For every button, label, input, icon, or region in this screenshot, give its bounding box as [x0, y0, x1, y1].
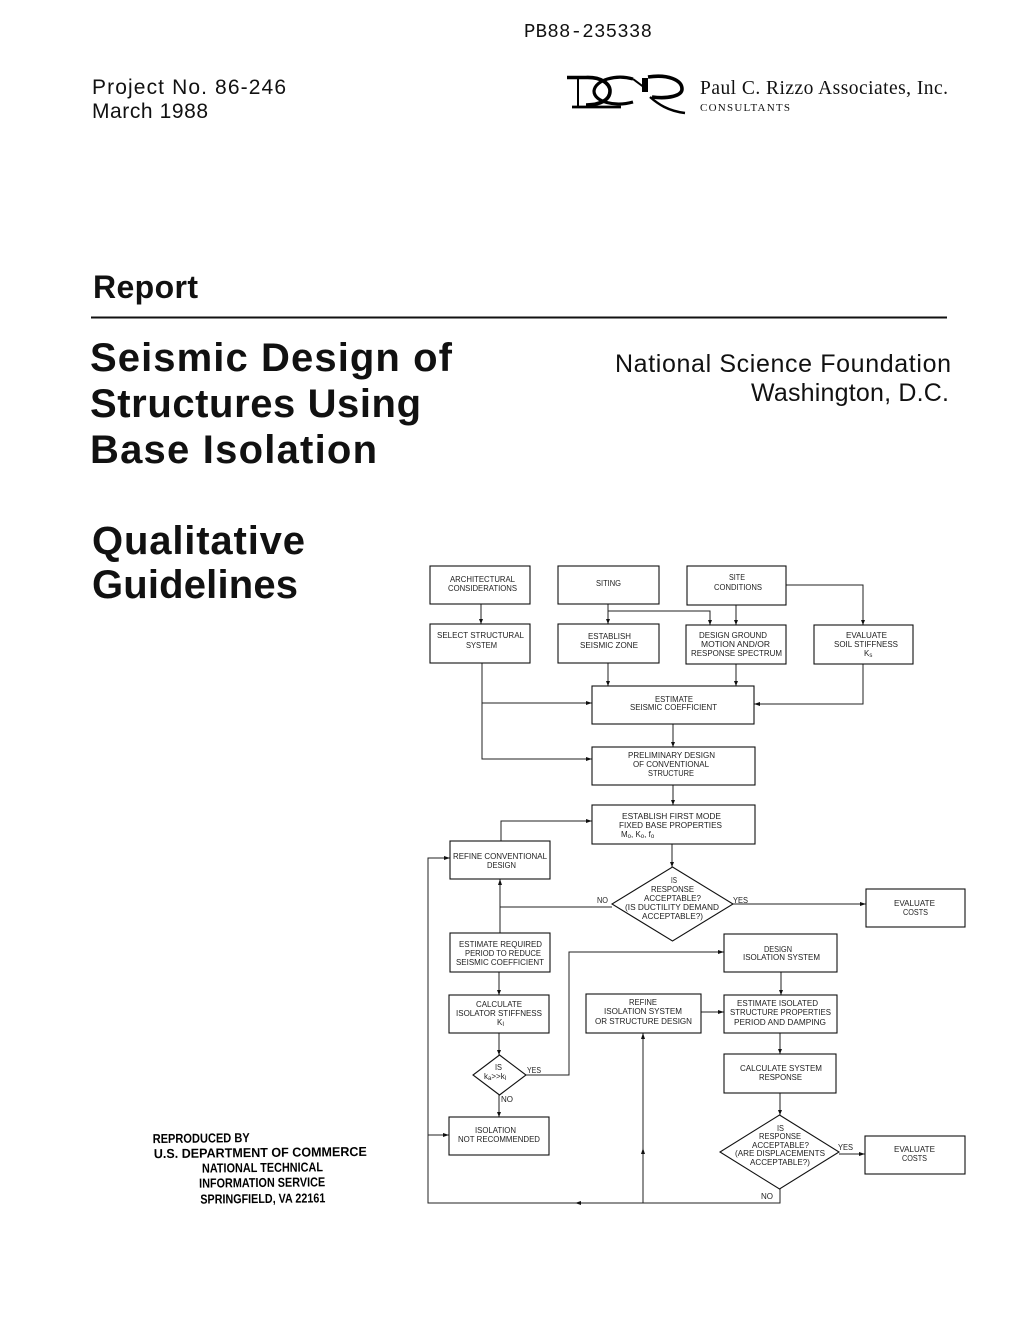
box: design isolation system: DESIGN: [764, 945, 792, 954]
box: establish first mode properties: o: [628, 834, 632, 840]
box: evaluate soil stiffness: s: [869, 653, 872, 659]
box: site conditions: SITE: [729, 573, 745, 582]
box: estimate seismic coefficient: SEISMIC COEFFICIENT: [630, 703, 717, 712]
label: yes: YES: [527, 1066, 541, 1075]
box: establish first mode properties: [592, 805, 755, 844]
box: evaluate costs upper: COSTS: [903, 908, 928, 917]
box: preliminary design: STRUCTURE: [648, 769, 694, 778]
box: refine conventional design: REFINE CONVENTIONAL: [453, 852, 548, 861]
sponsor block: National Science Foundation: [615, 350, 951, 378]
project number and date: Project No. 86-246: [92, 76, 286, 99]
decision: is response acceptable, displacements: RESPONSE: [759, 1132, 801, 1141]
decision: is response acceptable, ductility: ACCEPTABLE?): [642, 912, 703, 921]
decision: is ka much greater than ki: IS: [495, 1063, 502, 1072]
box: site conditions: [687, 566, 786, 605]
box: select structural system: SYSTEM: [466, 641, 497, 650]
box: refine isolation system: [586, 994, 701, 1033]
box: refine conventional design: [450, 841, 550, 879]
box: calculate system response: RESPONSE: [759, 1073, 802, 1082]
label: yes: YES: [838, 1143, 853, 1152]
box: estimate seismic coefficient: ESTIMATE: [655, 695, 693, 704]
title: Seismic Design of: [90, 336, 453, 380]
flowchart: [428, 566, 965, 1205]
box: establish seismic zone: SEISMIC ZONE: [580, 641, 638, 650]
decision: is ka much greater than ki: k: [484, 1072, 488, 1081]
document number: PB88-235338: [524, 21, 652, 43]
box: estimate required period: [450, 933, 550, 972]
decision: is response acceptable, ductility: RESPONSE: [651, 885, 694, 894]
box: evaluate soil stiffness: [814, 625, 913, 664]
box: preliminary design: [592, 747, 755, 785]
box: estimate required period: PERIOD TO REDUCE: [465, 949, 541, 958]
box: architectural considerations: ARCHITECTURAL: [450, 575, 516, 584]
box: evaluate costs lower: EVALUATE: [894, 1145, 935, 1154]
box: estimate isolated structure properties: ESTIMATE ISOLATED: [737, 999, 818, 1008]
decision: is ka much greater than ki: [473, 1055, 526, 1095]
box: isolation not recommended: NOT RECOMMENDED: [458, 1135, 540, 1144]
decision: is response acceptable, displacements: ACCEPTABLE?): [750, 1158, 810, 1167]
decision: is response acceptable, ductility: [612, 867, 733, 941]
box: select structural system: SELECT STRUCTURAL: [437, 631, 525, 640]
subtitle: [92, 519, 305, 607]
subtitle: Guidelines: [92, 563, 298, 607]
box: site conditions: CONDITIONS: [714, 583, 762, 592]
box: estimate isolated structure properties: [724, 995, 837, 1033]
box: calculate system response: CALCULATE SYSTEM: [740, 1064, 822, 1073]
decision: is response acceptable, ductility: ACCEPTABLE?: [644, 894, 702, 903]
title: Base Isolation: [90, 428, 377, 472]
box: design isolation system: [724, 934, 837, 972]
box: estimate required period: ESTIMATE REQUIRED: [459, 940, 542, 949]
box: design ground motion: MOTION AND/OR: [701, 640, 770, 649]
box: establish first mode properties: o: [651, 834, 655, 840]
company name: Paul C. Rizzo Associates, Inc.: [700, 78, 948, 99]
box: evaluate costs upper: EVALUATE: [894, 899, 935, 908]
box: refine conventional design: DESIGN: [487, 861, 516, 870]
title: [90, 336, 453, 472]
box: isolation not recommended: [449, 1117, 549, 1155]
box: isolation not recommended: ISOLATION: [475, 1126, 516, 1135]
decision: is response acceptable, displacements: IS: [777, 1124, 784, 1133]
box: calculate isolator stiffness: I: [502, 1022, 504, 1028]
decision: is response acceptable, ductility: (IS DUCTILITY DEMAND: [625, 903, 719, 912]
icon: company logo: [567, 76, 685, 113]
decision: is response acceptable, displacements: [720, 1115, 839, 1189]
box: estimate isolated structure properties: PERIOD AND DAMPING: [734, 1018, 826, 1027]
box: estimate isolated structure properties: STRUCTURE PROPERTIES: [730, 1008, 831, 1017]
project number and date: [92, 76, 286, 123]
title: Structures Using: [90, 382, 421, 426]
box: evaluate soil stiffness: K: [864, 649, 869, 658]
subtitle: Qualitative: [92, 519, 305, 563]
box: estimate seismic coefficient: [592, 686, 754, 724]
divider rule: [91, 316, 947, 318]
box: evaluate soil stiffness: SOIL STIFFNESS: [834, 640, 898, 649]
box: evaluate costs lower: COSTS: [902, 1154, 927, 1163]
connector arrows: upper section: [479, 585, 865, 867]
box: establish seismic zone: [558, 624, 659, 663]
box: calculate isolator stiffness: ISOLATOR STIFFNESS: [456, 1009, 542, 1018]
box: evaluate soil stiffness: EVALUATE: [846, 631, 887, 640]
box: preliminary design: OF CONVENTIONAL: [633, 760, 710, 769]
box: design ground motion: DESIGN GROUND: [699, 631, 767, 640]
reproduction notice: REPRODUCED BY: [153, 1130, 250, 1146]
box: establish first mode properties: , f: [644, 830, 652, 839]
box: estimate required period: SEISMIC COEFFICIENT: [456, 958, 544, 967]
box: architectural considerations: [430, 566, 530, 604]
decision: is response acceptable, displacements: ACCEPTABLE?: [752, 1141, 810, 1150]
box: establish first mode properties: o: [641, 834, 645, 840]
connector arrows: lower section: [428, 856, 866, 1205]
box: evaluate costs upper: [866, 889, 965, 927]
reproduction notice: INFORMATION SERVICE: [199, 1174, 325, 1191]
box: refine isolation system: ISOLATION SYSTEM: [604, 1007, 682, 1016]
sponsor block: Washington, D.C.: [751, 379, 949, 407]
box: refine isolation system: REFINE: [629, 998, 657, 1007]
reproduction notice: U.S. DEPARTMENT OF COMMERCE: [154, 1144, 367, 1161]
box: siting: [558, 566, 659, 604]
box: establish first mode properties: ESTABLISH FIRST MODE: [622, 812, 721, 821]
reproduction notice: NATIONAL TECHNICAL: [202, 1159, 323, 1176]
label: no: NO: [761, 1192, 773, 1201]
label: yes: YES: [733, 896, 748, 905]
box: select structural system: [430, 624, 530, 663]
label: no: NO: [597, 896, 608, 905]
box: calculate isolator stiffness: [449, 995, 549, 1033]
box: design ground motion: [686, 625, 786, 664]
box: calculate system response: [724, 1054, 836, 1093]
decision: is response acceptable, ductility: IS: [671, 876, 677, 885]
sponsor block: [615, 350, 951, 407]
box: calculate isolator stiffness: CALCULATE: [476, 1000, 522, 1009]
box: preliminary design: PRELIMINARY DESIGN: [628, 751, 715, 760]
box: refine isolation system: OR STRUCTURE DESIGN: [595, 1017, 692, 1026]
box: establish first mode properties: , K: [631, 830, 641, 839]
decision: is response acceptable, displacements: (ARE DISPLACEMENTS: [735, 1149, 825, 1158]
company name: CONSULTANTS: [700, 102, 790, 114]
decision: is ka much greater than ki: >>k: [491, 1072, 506, 1081]
box: siting: SITING: [596, 579, 621, 588]
reproduction notice: SPRINGFIELD, VA 22161: [200, 1190, 325, 1207]
box: design isolation system: ISOLATION SYSTEM: [743, 953, 820, 962]
label: no: NO: [501, 1095, 513, 1104]
box: calculate isolator stiffness: K: [497, 1018, 502, 1027]
box: architectural considerations: CONSIDERATIONS: [448, 584, 517, 593]
project number and date: March 1988: [92, 100, 208, 123]
decision: is ka much greater than ki: I: [505, 1076, 507, 1082]
box: establish first mode properties: FIXED BASE PROPERTIES: [619, 821, 722, 830]
reproduction notice: [153, 1129, 368, 1207]
heading: report: Report: [93, 269, 198, 305]
box: evaluate costs lower: [865, 1136, 965, 1174]
box: establish first mode properties: M: [621, 830, 628, 839]
company name: [700, 78, 948, 114]
box: design ground motion: RESPONSE SPECTRUM: [691, 649, 782, 658]
decision: is ka much greater than ki: a: [488, 1076, 492, 1082]
box: establish seismic zone: ESTABLISH: [588, 632, 631, 641]
